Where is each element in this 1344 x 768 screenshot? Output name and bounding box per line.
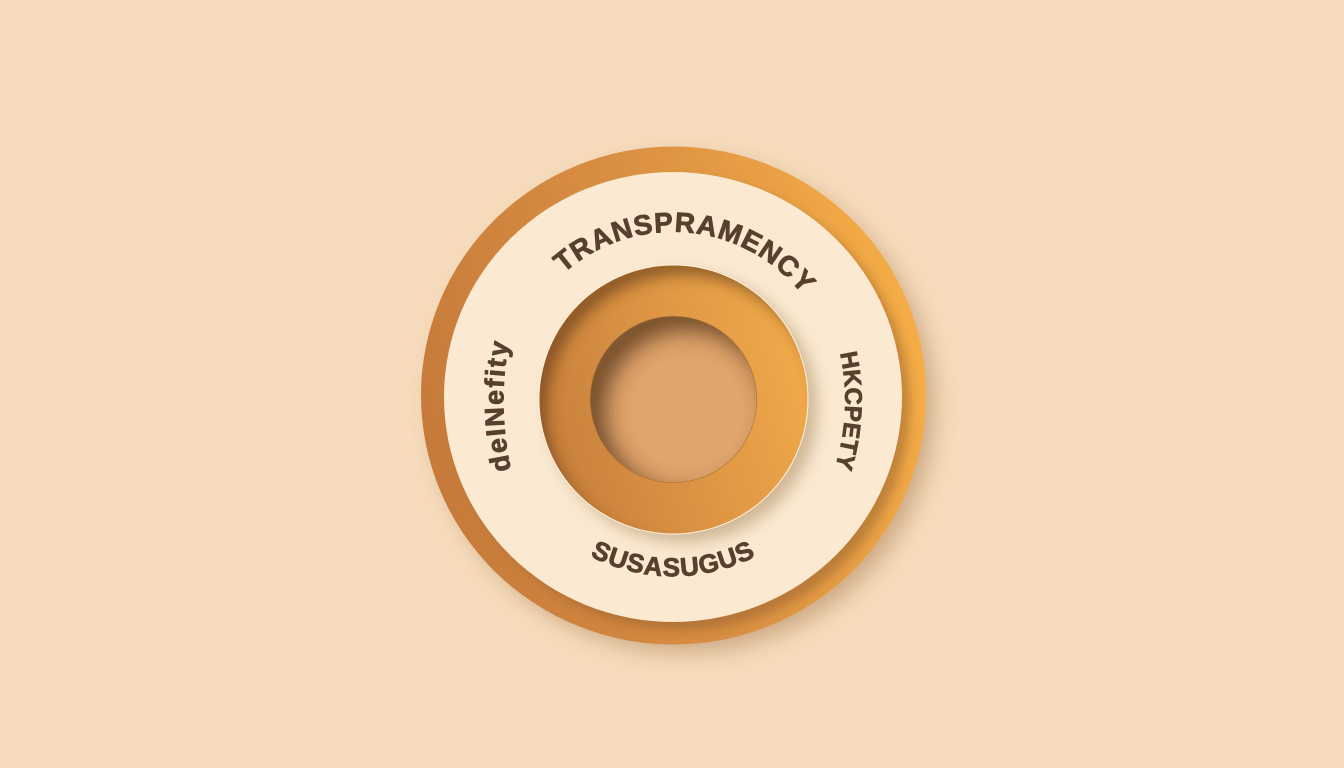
label: left: deINefity [484,340,513,471]
inner recessed circle [590,316,757,483]
label: right: HKCPETY [836,351,862,472]
outer disc [421,146,934,652]
recessed orange ring [537,264,829,557]
concentric ring diagram [421,146,946,664]
label: bottom: SUSASUGUS [592,542,754,577]
cream ring [444,172,902,622]
label: top: TRANSPRAMENCY [551,212,817,290]
